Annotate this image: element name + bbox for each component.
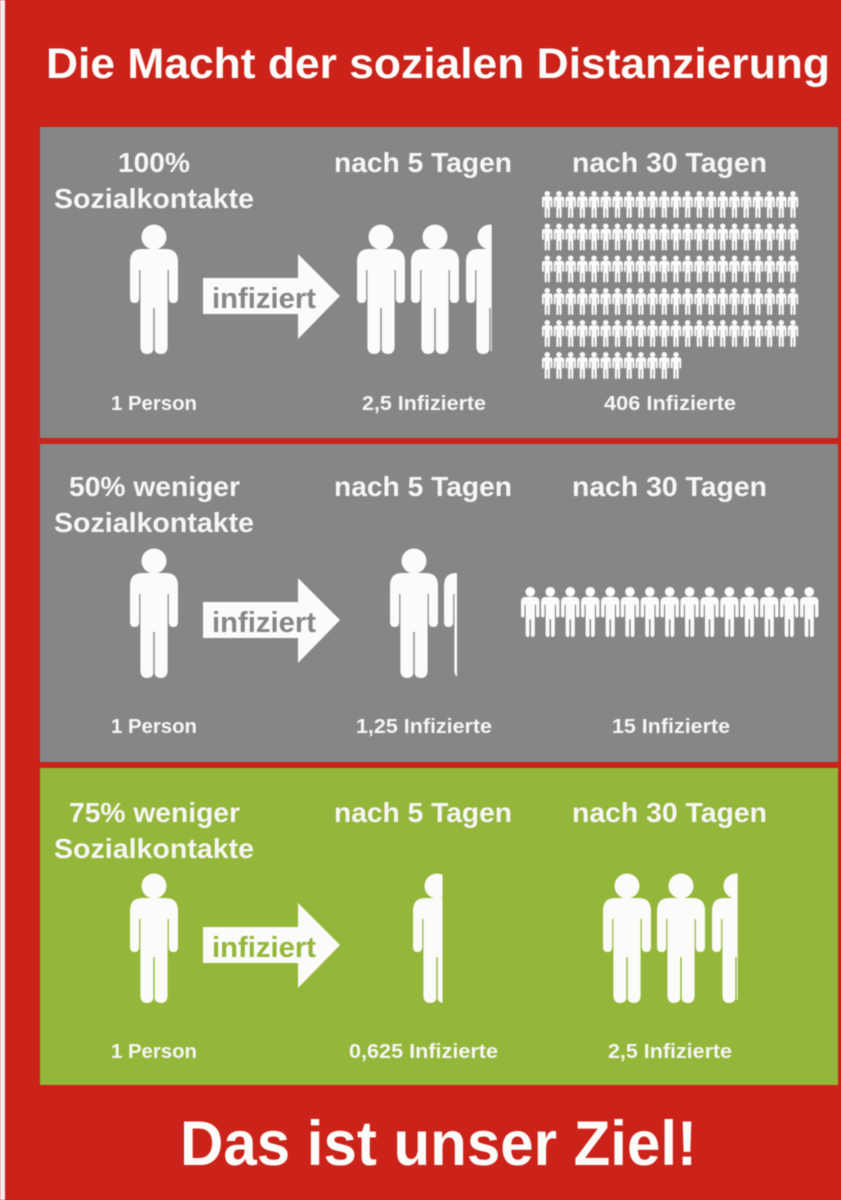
- heading: 100% Sozialkontakte: 100%: [118, 147, 190, 178]
- heading: 75% weniger Sozialkontakte: 75% weniger: [69, 797, 240, 828]
- heading: nach 5 Tagen: nach 5 Tagen: [334, 471, 512, 502]
- icon: one person: [130, 874, 178, 1003]
- caption: 15 Infizierte: 15 Infizierte: [612, 715, 730, 738]
- closing headline: Das ist unser Ziel!: [180, 1109, 697, 1179]
- icons: 406 people: [542, 191, 798, 379]
- arrow: infiziert: [203, 254, 340, 339]
- caption: 1 Person: 1 Person: [111, 392, 197, 415]
- caption: 1 Person: 1 Person: [111, 1040, 197, 1063]
- caption: 2,5 Infizierte: 2,5 Infizierte: [362, 392, 486, 415]
- caption: 0,625 Infizierte: 0,625 Infizierte: [349, 1040, 498, 1063]
- panel: 75% weniger Sozialkontakte: [40, 768, 838, 1085]
- heading: nach 30 Tagen: nach 30 Tagen: [572, 471, 767, 502]
- left white edge: [0, 0, 5, 1200]
- panel: 50% weniger Sozialkontakte: [40, 444, 838, 762]
- heading: 100% Sozialkontakte: Sozialkontakte: [54, 183, 254, 214]
- heading: nach 5 Tagen: nach 5 Tagen: [334, 797, 512, 828]
- icon: one person: [130, 548, 178, 678]
- arrow: infiziert: [203, 578, 340, 663]
- heading: 50% weniger Sozialkontakte: 50% weniger: [69, 471, 240, 502]
- caption: 2,5 Infizierte: 2,5 Infizierte: [608, 1040, 732, 1063]
- heading: nach 5 Tagen: nach 5 Tagen: [334, 147, 512, 178]
- heading: 50% weniger Sozialkontakte: Sozialkontakte: [54, 507, 254, 538]
- icon: one person: [130, 224, 178, 354]
- heading: 50% weniger Sozialkontakte: [54, 471, 254, 538]
- arrow: infiziert: infiziert: [212, 932, 316, 964]
- icons: 2.5 people: [602, 872, 738, 1004]
- icons: 15 people: [521, 587, 818, 637]
- heading: 75% weniger Sozialkontakte: Sozialkontakte: [54, 833, 254, 864]
- caption: 1,25 Infizierte: 1,25 Infizierte: [356, 715, 492, 738]
- arrow: infiziert: [203, 903, 340, 988]
- heading: nach 30 Tagen: nach 30 Tagen: [572, 797, 767, 828]
- caption: 406 Infizierte: 406 Infizierte: [604, 392, 736, 415]
- icons: 1.25 people: [389, 548, 458, 679]
- caption: 1 Person: 1 Person: [111, 715, 197, 738]
- arrow: infiziert: infiziert: [212, 283, 316, 315]
- heading: 100% Sozialkontakte: [54, 147, 254, 214]
- heading: nach 30 Tagen: nach 30 Tagen: [572, 147, 767, 178]
- icons: 2.5 people: [356, 224, 492, 355]
- title: Die Macht der sozialen Distanzierung: [46, 40, 830, 88]
- icon: 0.625 person: [412, 872, 444, 1004]
- panel: 100% Sozialkontakte: [40, 127, 838, 438]
- heading: 75% weniger Sozialkontakte: [54, 797, 254, 864]
- arrow: infiziert: infiziert: [212, 607, 316, 639]
